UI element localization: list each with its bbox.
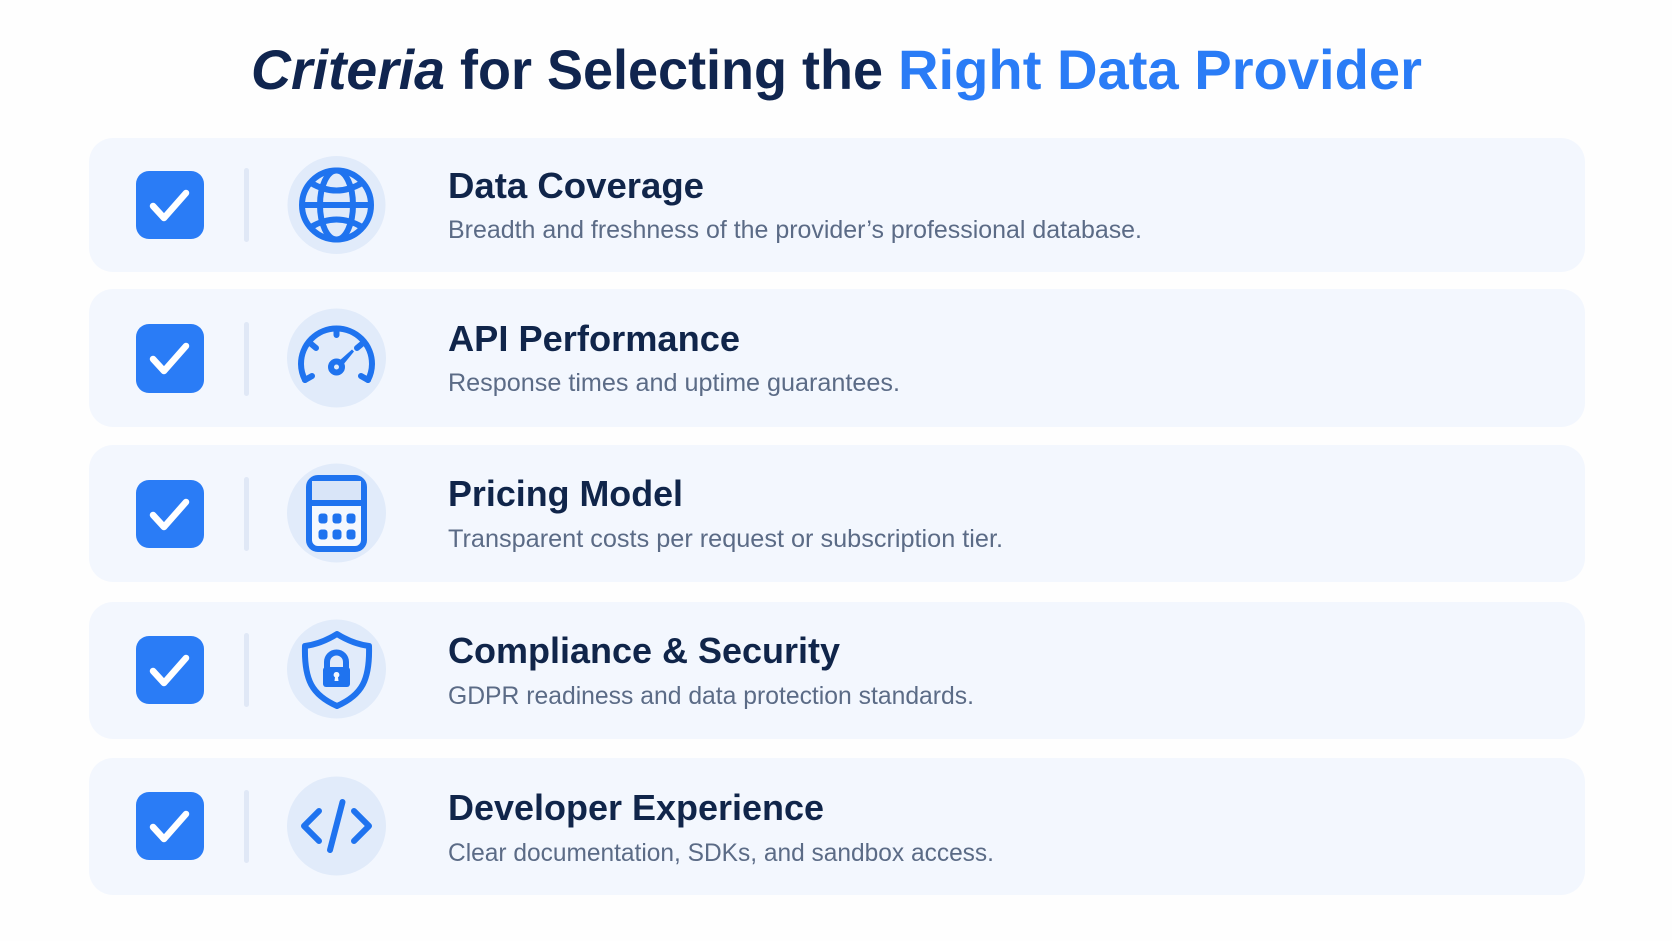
description: Clear documentation, SDKs, and sandbox access. bbox=[448, 839, 994, 867]
panel: Compliance & Security bbox=[89, 602, 1585, 739]
icon: code brackets bbox=[287, 776, 386, 876]
icon: speedometer bbox=[287, 308, 386, 408]
description: GDPR readiness and data protection standards. bbox=[448, 682, 974, 710]
heading: Pricing Model bbox=[448, 473, 683, 514]
heading: Developer Experience bbox=[448, 787, 824, 828]
panel: Data Coverage bbox=[89, 138, 1585, 272]
description: Response times and uptime guarantees. bbox=[448, 369, 900, 397]
panel: Pricing Model bbox=[89, 445, 1585, 582]
icon: globe bbox=[288, 156, 386, 254]
icon: calculator bbox=[287, 464, 386, 562]
heading: API Performance bbox=[448, 318, 740, 359]
heading: Data Coverage bbox=[448, 165, 704, 206]
description: Transparent costs per request or subscription tier. bbox=[448, 525, 1003, 553]
icon: checkbox bbox=[136, 480, 204, 548]
title: Criteria bbox=[251, 38, 445, 101]
title: Right Data Provider bbox=[898, 38, 1422, 101]
panel: API Performance bbox=[89, 289, 1585, 427]
title bbox=[251, 38, 1422, 101]
description: Breadth and freshness of the provider’s professional database. bbox=[448, 216, 1142, 244]
panel: Developer Experience bbox=[89, 758, 1585, 895]
icon: checkbox bbox=[136, 171, 204, 239]
icon: checkbox bbox=[136, 636, 204, 704]
title: for Selecting the bbox=[460, 38, 883, 101]
icon: checkbox bbox=[136, 792, 204, 860]
icon: checkbox bbox=[136, 324, 204, 393]
icon: shield with lock bbox=[287, 620, 386, 718]
heading: Compliance & Security bbox=[448, 630, 840, 671]
